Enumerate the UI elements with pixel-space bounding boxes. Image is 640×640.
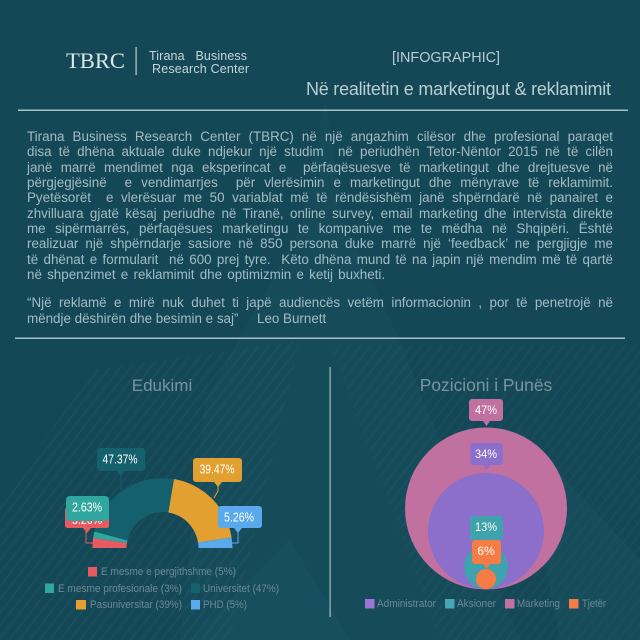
text block: quote [27, 295, 613, 326]
callout: 13%: 13% [475, 520, 497, 534]
logo: TBRC: Tirana Business [149, 49, 247, 63]
legend: job position [365, 598, 606, 610]
text block: introduction paragraph: me sipërmarrës, përfaqësues marketingu te kompanive me te mëdha në Shqipëri. Është [27, 221, 613, 236]
callout: 2.63% [66, 496, 109, 521]
callout: 5.26% red [65, 508, 109, 543]
callout: 5.26% blue: 5.26% [224, 510, 254, 524]
logo: TBRC [66, 47, 249, 76]
infographic tag: [INFOGRAPHIC] [392, 49, 500, 66]
callout: 47.37%: 47.37% [102, 452, 138, 466]
callout: 6%: 6% [477, 544, 495, 558]
heading: Edukimi: Edukimi [132, 376, 192, 395]
callout: 5.26% red: 5.26% [72, 512, 102, 527]
callout: 47.37% [97, 448, 145, 490]
callout: 34%: 34% [475, 447, 497, 461]
callout: 34% [470, 443, 503, 470]
callout: 5.26% blue [218, 506, 262, 543]
text block: introduction paragraph: Tirana Business Research Center (TBRC) në një angazhim cilësor dhe profesional paraqet [27, 129, 613, 144]
text block: introduction paragraph: Pyetësorët e vlerësuar me 50 variablat më të rëndësishëm janë shpërndarë në panairet e [27, 190, 613, 205]
text block: introduction paragraph: në shpenzimet e reklamimit dhe optimizmin e ketij buxheti. [27, 267, 385, 282]
text block: introduction paragraph: realizuar një shpërndarje sasiore në 850 persona duke marrë një ‘feedback’ ne pergjigje me [27, 236, 613, 251]
chart: job position nested circles [405, 399, 567, 590]
callout: 13% [470, 516, 503, 540]
legend: education: Universitet (47%) [203, 583, 279, 595]
legend: job position: Administrator [377, 598, 436, 610]
legend: job position: Tjetër [582, 598, 606, 610]
callout: 39.47%: 39.47% [200, 462, 235, 476]
text block: introduction paragraph: të dhënat e formularit në 600 prej tyre. Këto dhëna mund të na japin një mendim më të qartë [27, 252, 613, 267]
callout: 2.63%: 2.63% [72, 500, 102, 514]
logo: TBRC: TBRC [66, 48, 125, 73]
text block: introduction paragraph: disa të dhëna aktuale duke ndjekur një studim në periudhën Tetor-Nëntor 2015 në të cilën [27, 144, 613, 159]
legend: education: E mesme profesionale (3%) [58, 583, 182, 595]
legend: education: Pasuniversitar (39%) [90, 599, 182, 611]
callout: 6% [472, 540, 501, 569]
legend: job position: Aksioner [457, 598, 496, 610]
callout: 39.47% [193, 458, 242, 498]
logo: TBRC: Research Center [152, 62, 249, 76]
callout: 47%: 47% [475, 403, 497, 417]
text block: introduction paragraph: janë marrë mendimet nga eksperincat e përfaqësuesve të marketingut dhe drejtuesve në [27, 160, 613, 175]
text block: introduction paragraph: përgjegjësinë e vendimarrjes për vlerësimin e marketingut dhe mënyrave të reklamimit. [27, 175, 613, 190]
text block: quote: mëndje dëshirën dhe besimin e saj” Leo Burnett [27, 311, 326, 326]
title: Në realitetin e marketingut & reklamimit [306, 79, 611, 99]
heading: Pozicioni i Punës: Pozicioni i Punës [420, 375, 553, 395]
text block: quote: “Një reklamë e mirë nuk duhet ti japë audiencës vetëm informacionin , por të penetrojë në [27, 295, 613, 310]
legend: job position: Marketing [517, 598, 560, 610]
legend: education: E mesme e pergjithshme (5%) [101, 566, 236, 578]
legend: education: PHD (5%) [203, 599, 247, 611]
text block: introduction paragraph [26, 129, 613, 282]
legend: education [45, 566, 279, 611]
chart: education semi-donut [65, 448, 262, 548]
callout: 47% [469, 399, 503, 426]
text block: introduction paragraph: zhvilluara gjatë kësaj periudhe në Tiranë, online survey, email marketing dhe intervista direkte [27, 206, 613, 221]
